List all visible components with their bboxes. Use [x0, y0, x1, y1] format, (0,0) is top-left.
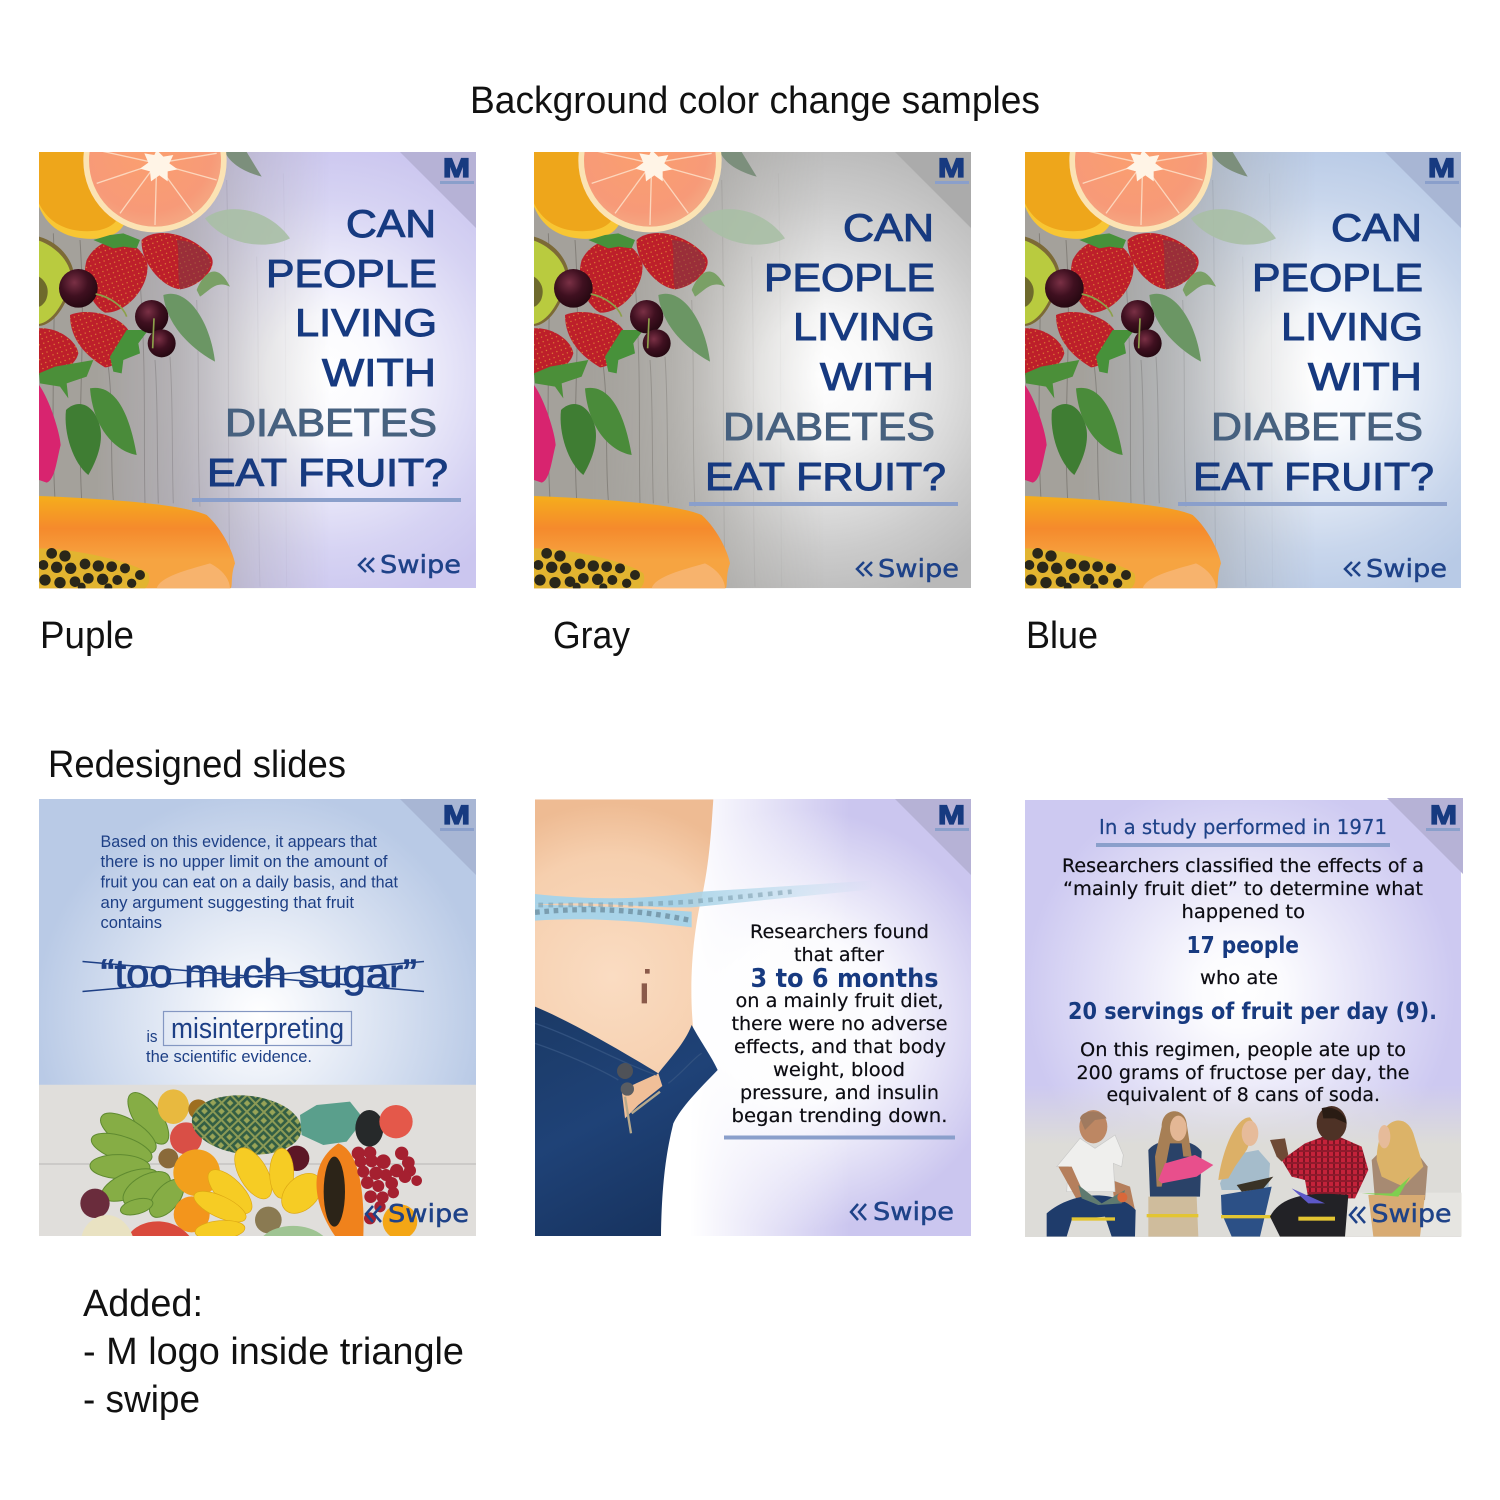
highlight: servings: 20 servings of fruit per day (9). [1068, 999, 1437, 1025]
panel background [1025, 800, 1461, 1237]
M logo [935, 153, 969, 184]
white fade behind photo [535, 799, 850, 1236]
regimen text: On this regimen, people ate up to [1080, 1039, 1406, 1061]
heading: WITH [322, 352, 436, 395]
swipe: Swipe [1372, 1199, 1452, 1228]
corner triangle [1385, 152, 1461, 228]
title: Background color change samples [470, 80, 1040, 122]
label: Gray: Gray [553, 615, 630, 657]
corner triangle [1387, 798, 1463, 874]
regimen text: equivalent of 8 cans of soda. [1106, 1084, 1380, 1106]
panel background [534, 152, 971, 588]
fruit photo [38, 89, 339, 591]
heading: DIABETES [1211, 406, 1423, 449]
M logo: M [443, 800, 470, 830]
heading: CAN [843, 207, 934, 250]
heading: EAT FRUIT? [705, 456, 946, 499]
swipe: Swipe [1366, 554, 1447, 583]
intro text: any argument suggesting that fruit [100, 893, 354, 912]
intro text: Based on this evidence, it appears that [100, 832, 377, 851]
body text: pressure, and insulin [740, 1082, 939, 1104]
corner triangle [895, 799, 971, 875]
body text: weight, blood [773, 1059, 905, 1081]
panel: blue sample [1024, 89, 1461, 591]
notes: what was added: - swipe [83, 1379, 200, 1421]
heading [705, 207, 946, 499]
panel background [39, 799, 476, 1085]
M logo: M [1428, 153, 1455, 183]
heading: CAN [1331, 207, 1422, 250]
heading [207, 203, 448, 495]
heading: PEOPLE [1252, 257, 1423, 300]
M logo [1425, 153, 1459, 184]
body text: there were no adverse [732, 1013, 948, 1035]
highlight: 17 people: 17 people [1186, 933, 1299, 959]
heading: LIVING [1281, 306, 1423, 349]
misinterpreting box: misinterpreting [171, 1013, 344, 1045]
section heading: redesigned slides: Redesigned slides [48, 744, 346, 786]
body text: 3 to 6 months [750, 964, 938, 994]
heading [1193, 207, 1434, 499]
heading: EAT FRUIT? [1193, 456, 1434, 499]
corner triangle [400, 152, 476, 228]
panel: 1971 study slide [1025, 798, 1463, 1237]
swipe: Swipe [388, 1199, 469, 1228]
students photo [1047, 1106, 1462, 1237]
swipe: Swipe [878, 554, 959, 583]
who ate: who ate [1200, 967, 1278, 989]
fruit photo [1024, 89, 1325, 591]
corner triangle [895, 152, 971, 228]
M logo: M [938, 153, 965, 183]
heading: EAT FRUIT? [207, 452, 448, 495]
bottom fade [1025, 1085, 1461, 1237]
panel: too much sugar slide [39, 799, 476, 1241]
panel: gray sample [533, 89, 971, 591]
panel: purple sample [38, 89, 476, 591]
heading: PEOPLE [266, 253, 437, 296]
intro text: fruit you can eat on a daily basis, and that [100, 872, 398, 892]
notes: what was added: Added: [83, 1283, 203, 1325]
label: Puple: Puple [40, 615, 134, 657]
panel background [535, 799, 971, 1236]
fruit photo [39, 1085, 476, 1241]
intro text: Researchers classified the effects of a [1062, 855, 1424, 877]
panel background [39, 152, 476, 588]
body text: began trending down. [732, 1105, 948, 1127]
closing text: the scientific evidence. [146, 1047, 312, 1066]
panel: waist slide [535, 799, 971, 1236]
heading: LIVING [295, 302, 437, 345]
body text: effects, and that body [734, 1036, 946, 1058]
heading: WITH [820, 356, 934, 399]
heading underline [689, 502, 958, 506]
M logo: M [938, 800, 965, 830]
intro text: “mainly fruit diet” to determine what [1063, 878, 1423, 900]
body text [732, 921, 948, 1127]
notes: what was added: - M logo inside triangle [83, 1331, 464, 1373]
waist photo [535, 799, 872, 1236]
struck through phrase: “too much sugar” [100, 952, 417, 996]
intro text: there is no upper limit on the amount of [100, 852, 388, 871]
M logo: M [443, 153, 470, 183]
subheading: In a study performed in 1971 [1099, 815, 1387, 839]
notes: what was added [83, 1283, 464, 1421]
subheading underline [1096, 843, 1390, 847]
swipe: Swipe [380, 550, 461, 579]
heading: PEOPLE [764, 257, 935, 300]
M logo [440, 800, 474, 831]
M logo [1426, 800, 1460, 831]
body text: on a mainly fruit diet, [736, 990, 944, 1012]
heading: WITH [1308, 356, 1422, 399]
heading: LIVING [793, 306, 935, 349]
heading underline [192, 498, 461, 502]
heading: CAN [346, 203, 436, 246]
heading: DIABETES [225, 402, 437, 445]
underline [724, 1136, 955, 1140]
intro text [1062, 855, 1424, 923]
label: Blue: Blue [1026, 615, 1098, 657]
M logo [935, 800, 969, 831]
regimen text: 200 grams of fructose per day, the [1076, 1062, 1410, 1084]
M logo [440, 153, 474, 184]
body text: that after [794, 944, 884, 966]
swipe: Swipe [873, 1197, 954, 1226]
fruit photo [533, 89, 834, 591]
panel background [1025, 152, 1461, 588]
corner triangle [400, 799, 476, 875]
heading: DIABETES [723, 406, 935, 449]
intro text: contains [100, 913, 162, 932]
regimen text [1076, 1039, 1410, 1106]
M logo: M [1430, 800, 1457, 830]
word is: is [146, 1027, 158, 1046]
body text: Researchers found [750, 921, 929, 943]
heading underline [1178, 502, 1447, 506]
intro text: happened to [1182, 901, 1305, 923]
intro text [100, 832, 398, 932]
